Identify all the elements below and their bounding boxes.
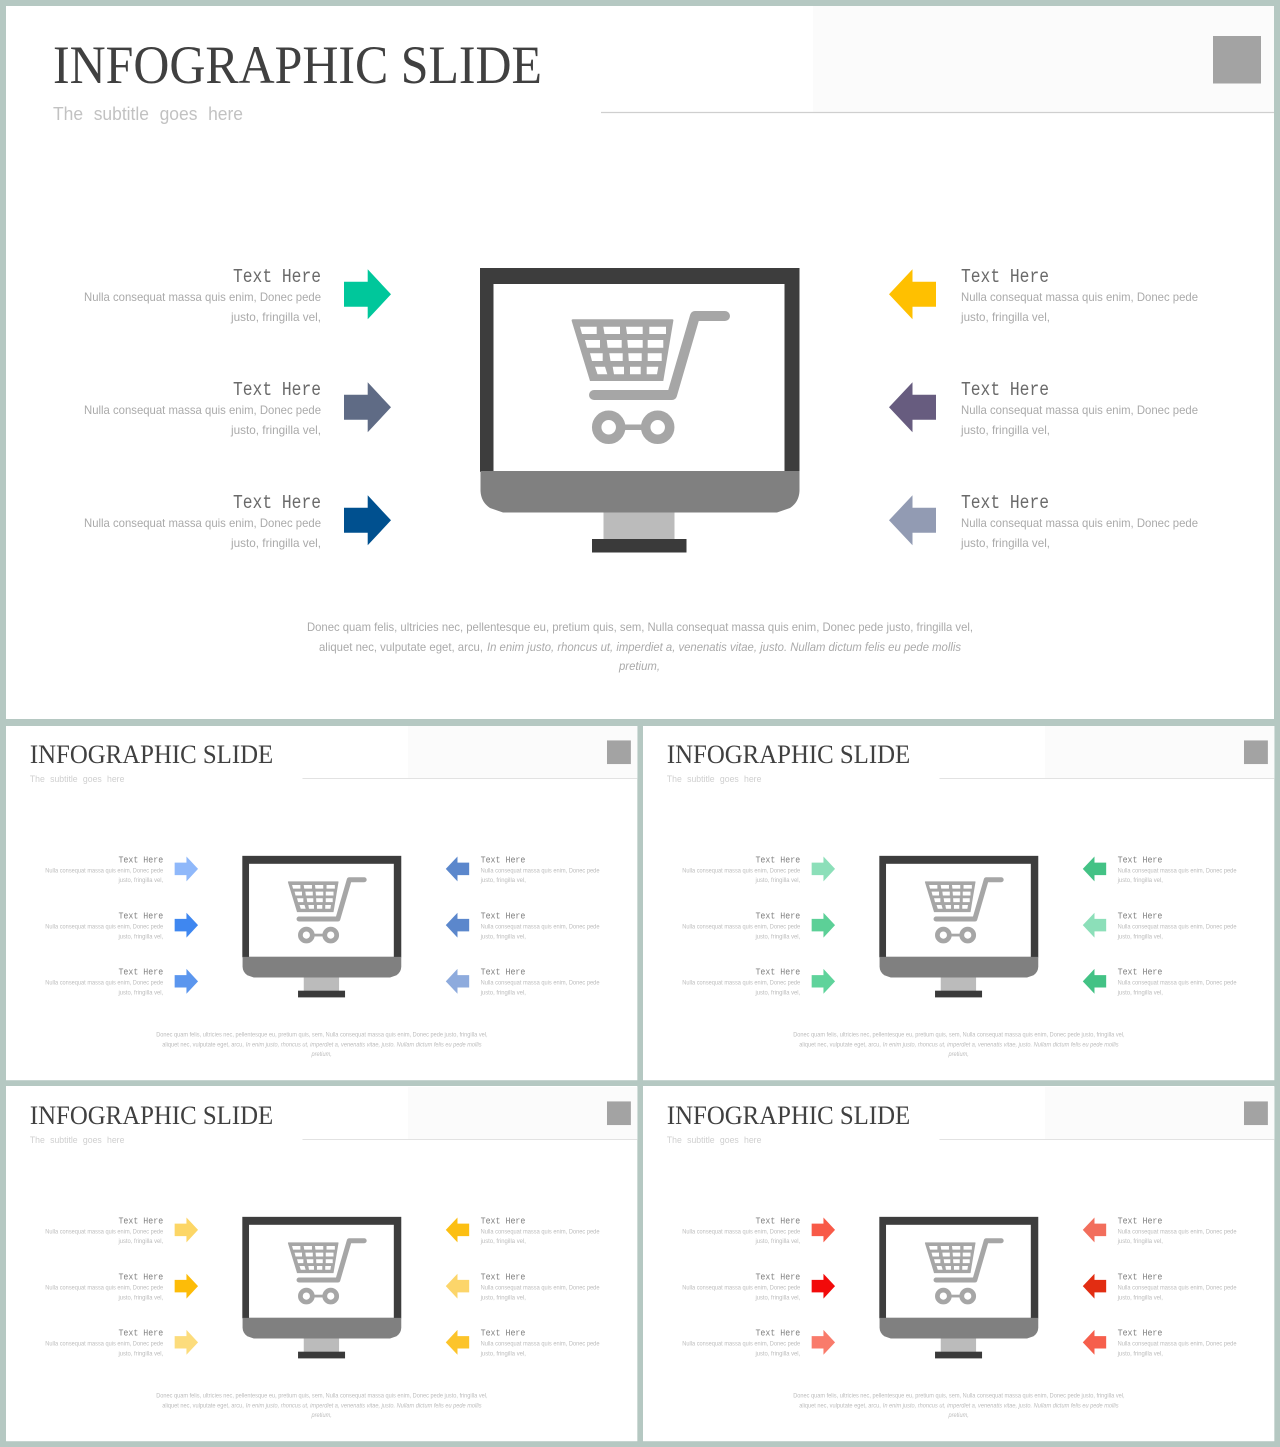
panel: yellow slide xyxy=(6,1086,637,1441)
text block: Text Here xyxy=(1118,967,1163,978)
text block: justo, fringilla vel, xyxy=(117,991,164,997)
text block xyxy=(84,266,321,324)
panel: green slide xyxy=(643,726,1274,1080)
text block: Text Here xyxy=(233,379,321,401)
text block: Nulla consequat massa quis enim, Donec pede xyxy=(1118,1342,1237,1348)
text block: Nulla consequat massa quis enim, Donec pede xyxy=(682,924,801,930)
text block: Nulla consequat massa quis enim, Donec pede xyxy=(1118,1285,1237,1291)
item: right row 1 xyxy=(1083,1215,1237,1245)
text block: justo, fringilla vel, xyxy=(1117,1239,1163,1245)
arrow xyxy=(889,382,936,432)
text block: justo, fringilla vel, xyxy=(117,878,164,884)
icon: monitor with shopping cart xyxy=(242,856,401,997)
text block: Nulla consequat massa quis enim, Donec pede xyxy=(1118,924,1237,930)
text block: Nulla consequat massa quis enim, Donec pede xyxy=(682,868,801,874)
item: left row 2 xyxy=(682,1272,835,1301)
text block: Text Here xyxy=(755,1215,800,1226)
arrow xyxy=(446,1217,469,1242)
text block xyxy=(682,911,801,940)
arrow xyxy=(175,1217,198,1242)
text block: footer paragraph xyxy=(793,1032,1125,1058)
item: right row 2 xyxy=(1083,911,1237,940)
arrow xyxy=(1083,969,1106,994)
item: right row 1 xyxy=(889,266,1198,324)
arrow xyxy=(1083,856,1106,881)
item: right row 1 xyxy=(1083,854,1237,884)
text block: justo, fringilla vel, xyxy=(230,536,321,550)
text block: footer paragraph xyxy=(793,1393,1125,1419)
item: left row 2 xyxy=(84,379,391,437)
text block: Nulla consequat massa quis enim, Donec pede xyxy=(84,290,321,304)
text block: justo, fringilla vel, xyxy=(480,991,526,997)
arrow xyxy=(175,969,198,994)
text block: Nulla consequat massa quis enim, Donec pede xyxy=(1118,868,1237,874)
text block xyxy=(682,1328,801,1358)
item: left row 3 xyxy=(682,967,835,997)
item: right row 3 xyxy=(446,967,600,997)
text block: Nulla consequat massa quis enim, Donec pede xyxy=(45,1285,164,1291)
text block: Nulla consequat massa quis enim, Donec pede xyxy=(84,516,321,530)
text block: Text Here xyxy=(118,967,163,978)
item: right row 2 xyxy=(446,1272,600,1301)
text block: Nulla consequat massa quis enim, Donec pede xyxy=(961,403,1198,417)
text block: Text Here xyxy=(755,911,800,922)
text block xyxy=(1117,911,1237,940)
text block: Nulla consequat massa quis enim, Donec pede xyxy=(481,1342,600,1348)
subtitle: The subtitle goes here xyxy=(30,774,124,784)
text block: Text Here xyxy=(755,854,800,865)
arrow xyxy=(812,856,835,881)
text block: justo, fringilla vel, xyxy=(754,1295,801,1301)
icon: monitor with shopping cart xyxy=(242,1217,401,1358)
icon: grey square xyxy=(1213,36,1261,84)
arrow xyxy=(175,1274,198,1299)
text block: Nulla consequat massa quis enim, Donec pede xyxy=(682,1285,801,1291)
item: right row 2 xyxy=(446,911,600,940)
text block: Text Here xyxy=(233,492,321,514)
text block: footer paragraph: Donec quam felis, ultricies nec, pellentesque eu, pretium quis, sem, Nulla consequat massa quis enim, Donec pede justo, fringilla vel, xyxy=(793,1032,1125,1038)
arrow xyxy=(812,1274,835,1299)
text block xyxy=(84,379,321,437)
text block: Text Here xyxy=(118,1272,163,1283)
panel: red slide xyxy=(643,1086,1274,1441)
item: right row 3 xyxy=(889,492,1198,550)
arrow xyxy=(175,913,198,938)
arrow xyxy=(812,1330,835,1355)
arrow xyxy=(812,1217,835,1242)
text block: justo, fringilla vel, xyxy=(754,1352,801,1358)
text block: Text Here xyxy=(481,1272,526,1283)
text block: Nulla consequat massa quis enim, Donec pede xyxy=(682,981,801,987)
arrow xyxy=(1083,1217,1106,1242)
text block: footer paragraph xyxy=(307,620,973,673)
item: right row 2 xyxy=(889,379,1198,437)
item: left row 3 xyxy=(45,1328,198,1358)
text block xyxy=(682,1272,801,1301)
text block: Text Here xyxy=(961,266,1049,288)
text block: Nulla consequat massa quis enim, Donec pede xyxy=(481,868,600,874)
text block xyxy=(45,911,164,940)
text block: footer paragraph xyxy=(156,1032,488,1058)
text block: Text Here xyxy=(118,911,163,922)
item: left row 1 xyxy=(682,1215,835,1245)
text block: footer paragraph: aliquet nec, vulputate eget, arcu, xyxy=(319,640,483,654)
item: left row 1 xyxy=(45,854,198,884)
text block: Nulla consequat massa quis enim, Donec pede xyxy=(682,1229,801,1235)
text block xyxy=(45,854,164,884)
text block: footer paragraph: In enim justo, rhoncus ut, imperdiet a, venenatis vitae, justo. Nullam dictum felis eu pede mollis xyxy=(487,640,961,654)
text block: Nulla consequat massa quis enim, Donec pede xyxy=(481,981,600,987)
text block xyxy=(480,911,600,940)
arrow xyxy=(175,856,198,881)
text block: footer paragraph: pretium, xyxy=(311,1413,332,1419)
text block: Nulla consequat massa quis enim, Donec pede xyxy=(481,924,600,930)
text block xyxy=(480,1272,600,1301)
text block: footer paragraph: pretium, xyxy=(618,659,660,673)
item: right row 3 xyxy=(1083,967,1237,997)
text block xyxy=(480,854,600,884)
text block: Nulla consequat massa quis enim, Donec pede xyxy=(45,924,164,930)
text block xyxy=(682,1215,801,1245)
text block: justo, fringilla vel, xyxy=(1117,991,1163,997)
item: left row 1 xyxy=(682,854,835,884)
text block: Text Here xyxy=(755,1328,800,1339)
text block: justo, fringilla vel, xyxy=(230,423,321,437)
text block: Nulla consequat massa quis enim, Donec pede xyxy=(961,516,1198,530)
text block: Text Here xyxy=(1118,1272,1163,1283)
text block: footer paragraph: pretium, xyxy=(948,1413,969,1419)
text block xyxy=(1117,1215,1237,1245)
item: left row 1 xyxy=(45,1215,198,1245)
text block xyxy=(45,1272,164,1301)
arrow xyxy=(344,382,391,432)
arrow xyxy=(446,1330,469,1355)
item: left row 1 xyxy=(84,266,391,324)
text block: footer paragraph: Donec quam felis, ultricies nec, pellentesque eu, pretium quis, sem, Nulla consequat massa quis enim, Donec pede justo, fringilla vel, xyxy=(156,1393,488,1399)
text block: Text Here xyxy=(1118,911,1163,922)
text block: justo, fringilla vel, xyxy=(117,1239,164,1245)
text block: justo, fringilla vel, xyxy=(1117,1295,1163,1301)
text block: Nulla consequat massa quis enim, Donec pede xyxy=(1118,981,1237,987)
text block xyxy=(960,492,1198,550)
arrow xyxy=(889,269,936,319)
icon: grey square xyxy=(1244,1101,1268,1125)
text block: Text Here xyxy=(1118,1215,1163,1226)
text block: Text Here xyxy=(1118,1328,1163,1339)
text block: footer paragraph: pretium, xyxy=(311,1052,332,1058)
arrow xyxy=(812,969,835,994)
item: left row 2 xyxy=(682,911,835,940)
text block: Nulla consequat massa quis enim, Donec pede xyxy=(481,1285,600,1291)
text block: justo, fringilla vel, xyxy=(480,1352,526,1358)
text block: Nulla consequat massa quis enim, Donec pede xyxy=(45,868,164,874)
arrow xyxy=(1083,1330,1106,1355)
text block xyxy=(45,1328,164,1358)
text block: justo, fringilla vel, xyxy=(1117,878,1163,884)
text block: justo, fringilla vel, xyxy=(1117,1352,1163,1358)
item: right row 1 xyxy=(446,854,600,884)
text block: Text Here xyxy=(118,1215,163,1226)
text block: footer paragraph: In enim justo, rhoncus ut, imperdiet a, venenatis vitae, justo. Nullam dictum felis eu pede mollis xyxy=(246,1042,482,1048)
text block: justo, fringilla vel, xyxy=(754,1239,801,1245)
text block: Text Here xyxy=(1118,854,1163,865)
item: right row 3 xyxy=(446,1328,600,1358)
text block: justo, fringilla vel, xyxy=(117,1295,164,1301)
title: INFOGRAPHIC SLIDE xyxy=(30,1100,273,1130)
text block xyxy=(682,967,801,997)
text block: footer paragraph: In enim justo, rhoncus ut, imperdiet a, venenatis vitae, justo. Nullam dictum felis eu pede mollis xyxy=(883,1403,1119,1409)
text block: Text Here xyxy=(481,967,526,978)
text block: justo, fringilla vel, xyxy=(960,310,1050,324)
text block xyxy=(1117,854,1237,884)
text block: Nulla consequat massa quis enim, Donec pede xyxy=(682,1342,801,1348)
text block: footer paragraph: pretium, xyxy=(948,1052,969,1058)
text block xyxy=(1117,1272,1237,1301)
text block: footer paragraph: aliquet nec, vulputate eget, arcu, xyxy=(799,1403,881,1409)
item: left row 2 xyxy=(45,1272,198,1301)
text block: footer paragraph: Donec quam felis, ultricies nec, pellentesque eu, pretium quis, sem, Nulla consequat massa quis enim, Donec pede justo, fringilla vel, xyxy=(156,1032,488,1038)
text block: footer paragraph: In enim justo, rhoncus ut, imperdiet a, venenatis vitae, justo. Nullam dictum felis eu pede mollis xyxy=(246,1403,482,1409)
item: left row 3 xyxy=(45,967,198,997)
item: right row 3 xyxy=(1083,1328,1237,1358)
text block: justo, fringilla vel, xyxy=(480,1239,526,1245)
text block: Text Here xyxy=(118,1328,163,1339)
text block: Nulla consequat massa quis enim, Donec pede xyxy=(45,1342,164,1348)
text block: Text Here xyxy=(961,492,1049,514)
text block: footer paragraph xyxy=(156,1393,488,1419)
arrow xyxy=(1083,913,1106,938)
text block: justo, fringilla vel, xyxy=(117,934,164,940)
arrow xyxy=(1083,1274,1106,1299)
text block: Nulla consequat massa quis enim, Donec pede xyxy=(45,1229,164,1235)
arrow xyxy=(889,495,936,545)
icon: monitor with shopping cart xyxy=(480,268,800,552)
text block xyxy=(960,266,1198,324)
title: INFOGRAPHIC SLIDE xyxy=(30,739,273,769)
arrow xyxy=(344,495,391,545)
item: left row 2 xyxy=(45,911,198,940)
arrow xyxy=(344,269,391,319)
text block: justo, fringilla vel, xyxy=(960,536,1050,550)
text block: Text Here xyxy=(233,266,321,288)
text block: justo, fringilla vel, xyxy=(230,310,321,324)
text block: footer paragraph: Donec quam felis, ultricies nec, pellentesque eu, pretium quis, sem, Nulla consequat massa quis enim, Donec pede justo, fringilla vel, xyxy=(793,1393,1125,1399)
text block: justo, fringilla vel, xyxy=(480,1295,526,1301)
text block xyxy=(45,1215,164,1245)
arrow xyxy=(446,856,469,881)
text block xyxy=(480,1215,600,1245)
arrow xyxy=(175,1330,198,1355)
text block: justo, fringilla vel, xyxy=(754,934,801,940)
text block xyxy=(84,492,321,550)
text block xyxy=(480,1328,600,1358)
text block: footer paragraph: aliquet nec, vulputate eget, arcu, xyxy=(162,1042,244,1048)
icon: monitor with shopping cart xyxy=(879,1217,1038,1358)
text block xyxy=(1117,967,1237,997)
text block xyxy=(1117,1328,1237,1358)
text block: Text Here xyxy=(118,854,163,865)
text block: Nulla consequat massa quis enim, Donec pede xyxy=(1118,1229,1237,1235)
text block: Text Here xyxy=(481,854,526,865)
text block: Text Here xyxy=(755,967,800,978)
item: left row 3 xyxy=(84,492,391,550)
text block: justo, fringilla vel, xyxy=(117,1352,164,1358)
text block: justo, fringilla vel, xyxy=(960,423,1050,437)
text block: footer paragraph: Donec quam felis, ultricies nec, pellentesque eu, pretium quis, sem, Nulla consequat massa quis enim, Donec pede justo, fringilla vel, xyxy=(307,620,973,634)
text block: Nulla consequat massa quis enim, Donec pede xyxy=(961,290,1198,304)
title: INFOGRAPHIC SLIDE xyxy=(667,1100,910,1130)
item: right row 2 xyxy=(1083,1272,1237,1301)
text block: justo, fringilla vel, xyxy=(480,878,526,884)
icon: grey square xyxy=(607,1101,631,1125)
icon: monitor with shopping cart xyxy=(879,856,1038,997)
text block: Nulla consequat massa quis enim, Donec pede xyxy=(84,403,321,417)
title: INFOGRAPHIC SLIDE xyxy=(53,35,542,95)
subtitle: The subtitle goes here xyxy=(30,1135,124,1145)
arrow xyxy=(446,969,469,994)
text block: justo, fringilla vel, xyxy=(754,991,801,997)
subtitle: The subtitle goes here xyxy=(667,1135,761,1145)
text block xyxy=(480,967,600,997)
text block: justo, fringilla vel, xyxy=(480,934,526,940)
text block xyxy=(45,967,164,997)
text block xyxy=(960,379,1198,437)
text block: Nulla consequat massa quis enim, Donec pede xyxy=(481,1229,600,1235)
text block: Text Here xyxy=(755,1272,800,1283)
text block: Text Here xyxy=(481,1215,526,1226)
text block: footer paragraph: In enim justo, rhoncus ut, imperdiet a, venenatis vitae, justo. Nullam dictum felis eu pede mollis xyxy=(883,1042,1119,1048)
text block: Nulla consequat massa quis enim, Donec pede xyxy=(45,981,164,987)
text block: justo, fringilla vel, xyxy=(754,878,801,884)
arrow xyxy=(812,913,835,938)
arrow xyxy=(446,1274,469,1299)
text block: Text Here xyxy=(961,379,1049,401)
icon: grey square xyxy=(1244,740,1268,764)
item: right row 1 xyxy=(446,1215,600,1245)
text block: footer paragraph: aliquet nec, vulputate eget, arcu, xyxy=(162,1403,244,1409)
text block: Text Here xyxy=(481,911,526,922)
arrow xyxy=(446,913,469,938)
text block: justo, fringilla vel, xyxy=(1117,934,1163,940)
subtitle: The subtitle goes here xyxy=(53,104,243,124)
text block: Text Here xyxy=(481,1328,526,1339)
item: left row 3 xyxy=(682,1328,835,1358)
panel: main slide xyxy=(6,6,1274,719)
icon: grey square xyxy=(607,740,631,764)
text block: footer paragraph: aliquet nec, vulputate eget, arcu, xyxy=(799,1042,881,1048)
title: INFOGRAPHIC SLIDE xyxy=(667,739,910,769)
subtitle: The subtitle goes here xyxy=(667,774,761,784)
text block xyxy=(682,854,801,884)
panel: blue slide xyxy=(6,726,637,1080)
